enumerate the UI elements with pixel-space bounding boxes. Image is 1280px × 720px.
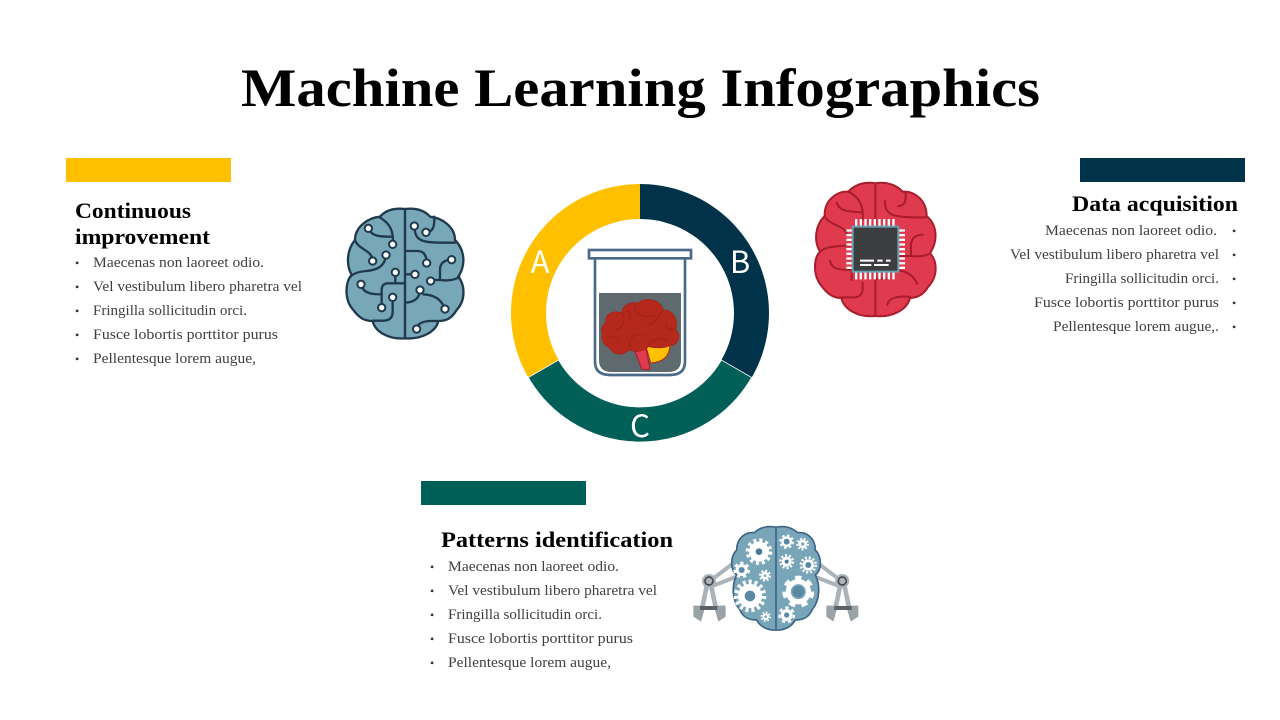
bullet list: patterns identification: •	[430, 560, 434, 574]
bullet list: data acquisition: Fringilla sollicitudin orci.	[1065, 271, 1219, 287]
bullet list: data acquisition: •	[1232, 272, 1236, 286]
heading: continuous improvement: improvement	[75, 224, 211, 249]
accent bar: green	[421, 481, 586, 505]
brain outline	[732, 527, 820, 630]
icon: robot arms with gear brain	[693, 527, 858, 630]
bullet list: continuous improvement	[75, 255, 302, 367]
segment C	[528, 360, 752, 442]
bullet list: patterns identification: •	[430, 584, 434, 598]
bullet list: patterns identification: Maecenas non laoreet odio.	[448, 559, 619, 575]
bullet list: patterns identification: Fusce lobortis porttitor purus	[448, 631, 633, 647]
bullet list: patterns identification: •	[430, 608, 434, 622]
bullet list: data acquisition	[1010, 223, 1236, 335]
bullet list: patterns identification: •	[430, 656, 434, 670]
bullet list: data acquisition: Vel vestibulum libero pharetra vel	[1010, 247, 1219, 263]
donut chart	[511, 184, 769, 446]
label A: A	[531, 237, 550, 282]
bullet list: data acquisition: •	[1232, 248, 1236, 262]
panel: continuous improvement	[66, 158, 302, 367]
gears	[735, 535, 816, 622]
panel: data acquisition	[1010, 158, 1245, 335]
segment A	[511, 184, 640, 378]
label C: C	[630, 401, 650, 446]
bullet list: data acquisition: Fusce lobortis porttitor purus	[1034, 295, 1219, 311]
heading: data acquisition: Data acquisition	[1072, 191, 1239, 216]
bullet list: patterns identification: Vel vestibulum libero pharetra vel	[448, 583, 657, 599]
icon: beaker with brain	[589, 250, 691, 375]
bullet list: data acquisition: Pellentesque lorem augue,.	[1053, 319, 1219, 335]
bullet list: patterns identification: •	[430, 632, 434, 646]
panel: patterns identification	[421, 481, 674, 671]
bullet list: continuous improvement: Fusce lobortis porttitor purus	[93, 327, 278, 343]
icon: circuit brain	[346, 209, 463, 338]
bullet list: patterns identification: Fringilla sollicitudin orci.	[448, 607, 602, 623]
segment B	[640, 184, 769, 378]
bullet list: continuous improvement: Pellentesque lorem augue,	[93, 351, 256, 367]
bullet list: patterns identification	[430, 559, 657, 671]
bullet list: continuous improvement: •	[75, 280, 79, 294]
heading: continuous improvement	[75, 198, 211, 249]
bullet list: continuous improvement: •	[75, 328, 79, 342]
bullet list: continuous improvement: •	[75, 352, 79, 366]
label B: B	[730, 237, 750, 282]
bullet list: continuous improvement: •	[75, 304, 79, 318]
bullet list: data acquisition: Maecenas non laoreet odio.	[1045, 223, 1217, 239]
bullet list: continuous improvement: Fringilla sollicitudin orci.	[93, 303, 247, 319]
robot arm right	[815, 563, 858, 622]
heading: continuous improvement: Continuous	[75, 198, 191, 223]
bullet list: data acquisition: •	[1232, 296, 1236, 310]
bullet list: patterns identification: Pellentesque lorem augue,	[448, 655, 611, 671]
bullet list: continuous improvement: Vel vestibulum libero pharetra vel	[93, 279, 302, 295]
bullet list: data acquisition: •	[1232, 224, 1236, 238]
heading: patterns identification: Patterns identification	[441, 527, 674, 552]
accent bar: navy	[1080, 158, 1245, 182]
bullet list: data acquisition: •	[1232, 320, 1236, 334]
bullet list: continuous improvement: •	[75, 256, 79, 270]
icon: brain with chip	[815, 183, 936, 316]
circuit nodes	[357, 222, 455, 333]
robot arm left	[693, 563, 737, 622]
accent bar: yellow	[66, 158, 231, 182]
title: Machine Learning Infographics	[241, 58, 1040, 118]
microchip	[849, 223, 902, 276]
bullet list: continuous improvement: Maecenas non laoreet odio.	[93, 255, 264, 271]
